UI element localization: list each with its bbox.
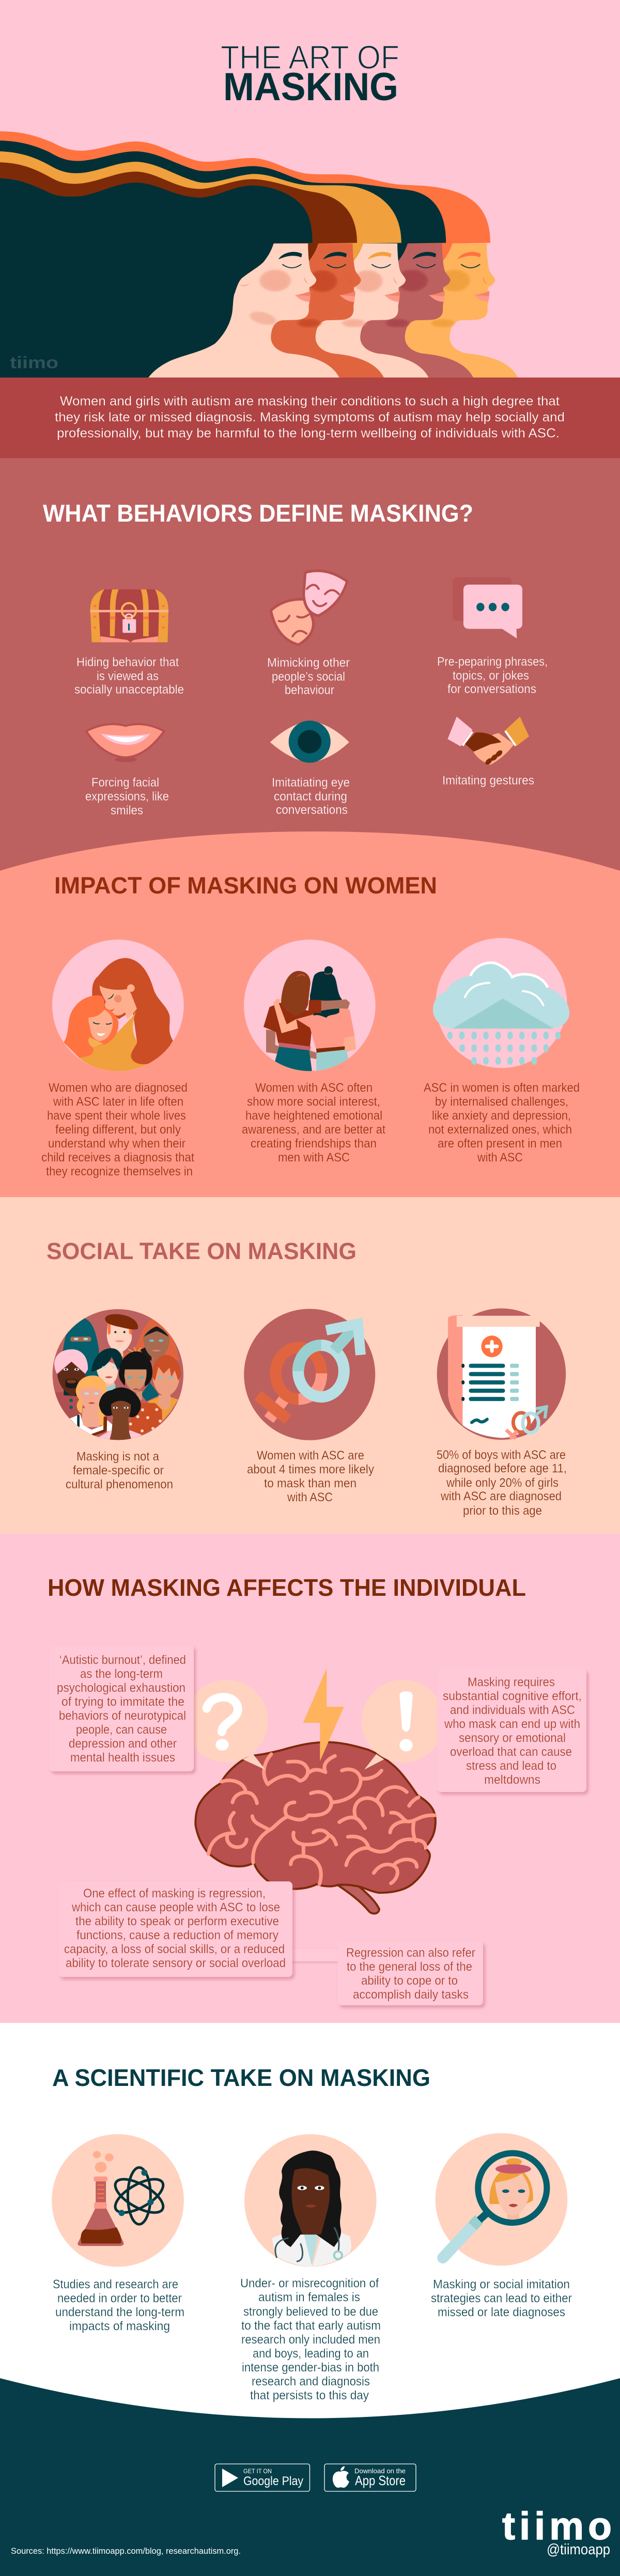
text: misrecognition of autism: research only included men: [241, 2333, 380, 2347]
text: not female-specific: female-specific or: [73, 1464, 164, 1478]
text: preparing phrases: for conversations: [447, 682, 536, 696]
item: imitating gestures: [442, 717, 534, 788]
callout: cognitive effort: meltdowns: [484, 1773, 540, 1787]
text: forcing facial expressions: smiles: [111, 804, 143, 818]
callout: cognitive effort: and individuals with ASC: [450, 1703, 575, 1717]
text: studies and research: impacts of masking: [69, 2319, 170, 2333]
text: rain cloud: ASC in women is often marked: [424, 1081, 580, 1095]
callout: cognitive effort: Masking requires: [468, 1675, 555, 1689]
title: MASKING: [223, 65, 398, 109]
text: not female-specific: Masking is not a: [76, 1450, 160, 1464]
icon: treasure chest with padlock: [90, 589, 168, 642]
illustration: rain cloud: [433, 938, 569, 1068]
text: four times more likely: about 4 times more likely: [247, 1463, 374, 1477]
badge: App Store: [324, 2464, 416, 2491]
text: diagnosis statistics: while only 20% of girls: [446, 1476, 559, 1490]
callout: regression: the ability to speak or perform executive: [75, 1914, 279, 1928]
item: forcing facial expressions: [85, 724, 169, 818]
text: four times more likely: Women with ASC are: [257, 1449, 364, 1463]
handle: @tiimoapp: @tiimoapp: [547, 2541, 610, 2558]
text: preparing phrases: Pre-peparing phrases,: [437, 655, 548, 669]
text: diagnosis statistics: [437, 1448, 567, 1518]
text: misrecognition of autism: Under- or misrecognition of: [240, 2276, 379, 2290]
callout: autistic burnout: people, can cause: [76, 1723, 167, 1737]
illustration: medical document: [437, 1308, 566, 1440]
callout: cognitive effort: sensory or emotional: [459, 1731, 566, 1745]
callout: autistic burnout: psychological exhaustion: [57, 1681, 185, 1695]
callout: regression: capacity, a loss of social skills, or a reduced: [64, 1942, 285, 1956]
illustration: flask and atom: [52, 2134, 184, 2267]
text: rain cloud: [424, 1081, 580, 1165]
text: two friends embracing: show more social interest,: [247, 1095, 380, 1109]
item: preparing phrases: [437, 577, 548, 696]
text: misrecognition of autism: research and diagnosis: [252, 2375, 370, 2389]
badge: Google Play: GET IT ON: [243, 2468, 272, 2475]
text: not female-specific: [66, 1450, 173, 1491]
text: social imitation strategies: missed or late diagnoses: [438, 2305, 565, 2319]
logo: tiimo: tiimo: [502, 2504, 612, 2548]
text: mimicking: Mimicking other: [267, 656, 350, 670]
text: mimicking: [267, 656, 350, 697]
icon: smiling lips: [86, 724, 164, 762]
illustration: magnifying glass: [436, 2133, 567, 2266]
callout: loss of ability to cope: accomplish daily tasks: [353, 1988, 469, 2002]
watermark logo: tiimo: [10, 353, 58, 372]
callout: loss of ability to cope: ability to cope or to: [361, 1974, 458, 1988]
intro banner: professionally, but may be harmful to the long-term wellbeing of individuals with ASC.: [57, 426, 560, 441]
hero illustration: five profiles with flowing hair: [0, 131, 518, 378]
text: rain cloud: are often present in men: [438, 1137, 562, 1151]
callout: loss of ability to cope: Regression can also refer: [346, 1946, 475, 1960]
callout: cognitive effort: who mask can end up with: [444, 1717, 580, 1731]
text: diagnosis statistics: 50% of boys with ASC are: [437, 1448, 566, 1462]
icon: brain with question, exclamation and lightning: [185, 1668, 444, 1913]
callout: loss of ability to cope: to the general loss of the: [347, 1960, 472, 1974]
text: eye contact: contact during: [274, 790, 347, 804]
text: studies and research: needed in order to better: [57, 2291, 182, 2305]
text: eye contact: [272, 776, 350, 817]
callout: cognitive effort: overload that can cause: [450, 1745, 572, 1759]
panel: a scientific take on masking: [0, 2023, 620, 2436]
text: four times more likely: with ASC: [287, 1490, 333, 1504]
text: hiding behavior: is viewed as: [97, 669, 159, 683]
panel: impact of masking on women: [0, 831, 620, 1197]
text: mother hugging child: feeling different, but only: [55, 1123, 181, 1137]
text: studies and research: [53, 2277, 184, 2333]
title: [221, 39, 399, 109]
callout: autistic burnout: depression and other: [69, 1737, 177, 1751]
text: misrecognition of autism: that persists to this day: [250, 2389, 369, 2402]
callout: regression: functions, cause a reduction of memory: [76, 1928, 278, 1942]
text: preparing phrases: [437, 655, 548, 696]
callout: autistic burnout: of trying to immitate the: [61, 1695, 184, 1709]
text: misrecognition of autism: and boys, leading to an: [253, 2347, 369, 2361]
callout: autistic burnout: mental health issues: [70, 1751, 175, 1765]
text: rain cloud: like anxiety and depression,: [432, 1109, 571, 1123]
text: studies and research: Studies and research are: [53, 2277, 178, 2291]
text: rain cloud: not externalized ones, which: [428, 1123, 572, 1137]
text: mother hugging child: with ASC later in life often: [53, 1095, 183, 1109]
text: forcing facial expressions: Forcing facial: [91, 776, 159, 790]
text: diagnosis statistics: with ASC are diagnosed: [440, 1489, 562, 1503]
item: eye contact: [270, 720, 350, 817]
illustration: gender symbols: [244, 1309, 375, 1440]
text: misrecognition of autism: intense gender-bias in both: [242, 2361, 379, 2375]
heading: social take on masking: SOCIAL TAKE ON MASKING: [47, 1238, 357, 1264]
callout: autistic burnout: ‘Autistic burnout’, defined: [59, 1653, 186, 1667]
heading: how masking affects the individual: HOW MASKING AFFECTS THE INDIVIDUAL: [48, 1574, 526, 1601]
text: two friends embracing: men with ASC: [278, 1151, 350, 1165]
text: not female-specific: cultural phenomenon: [66, 1478, 173, 1491]
text: two friends embracing: [242, 1081, 385, 1165]
text: rain cloud: by internalised challenges,: [435, 1095, 568, 1109]
heading: what behaviors define masking: WHAT BEHAVIORS DEFINE MASKING?: [43, 499, 473, 527]
text: misrecognition of autism: [240, 2276, 381, 2402]
text: mother hugging child: have spent their whole lives: [47, 1109, 186, 1123]
text: rain cloud: with ASC: [477, 1151, 523, 1165]
text: mother hugging child: understand why when their: [48, 1137, 185, 1151]
text: misrecognition of autism: autism in females is: [258, 2290, 360, 2304]
title: THE ART OF: [221, 39, 399, 76]
text: social imitation strategies: strategies can lead to either: [431, 2291, 572, 2305]
text: two friends embracing: creating friendships than: [251, 1137, 377, 1151]
illustration: doctor: [244, 2134, 377, 2267]
text: mother hugging child: child receives a diagnosis that: [41, 1151, 194, 1165]
text: eye contact: conversations: [276, 803, 348, 817]
badge: App Store: Download on the: [354, 2468, 406, 2475]
icon: handshake: [447, 717, 529, 765]
item: mimicking: [267, 571, 350, 697]
item: hiding behavior: [74, 589, 184, 697]
text: hiding behavior: [74, 655, 184, 697]
text: forcing facial expressions: [85, 776, 169, 818]
callout: cognitive effort: stress and lead to: [466, 1759, 556, 1773]
heading: a scientific take on masking: A SCIENTIFIC TAKE ON MASKING: [52, 2064, 430, 2091]
text: misrecognition of autism: to the fact that early autism: [241, 2319, 381, 2333]
illustration: two friends embracing: [244, 939, 376, 1072]
panel: how masking affects the individual: [0, 1534, 620, 2023]
text: two friends embracing: awareness, and are better at: [242, 1123, 385, 1137]
heading: impact of masking on women: IMPACT OF MASKING ON WOMEN: [54, 872, 437, 899]
callout: autistic burnout: behaviors of neurotypical: [59, 1709, 186, 1723]
text: four times more likely: [247, 1449, 374, 1504]
connector between regression callouts: [289, 1949, 341, 1961]
text: forcing facial expressions: expressions, like: [85, 790, 169, 804]
callout: regression: which can cause people with ASC to lose: [71, 1900, 280, 1914]
text: studies and research: understand the long-term: [55, 2305, 184, 2319]
callout: regression: [58, 1881, 292, 1977]
text: mother hugging child: [41, 1081, 194, 1179]
text: diagnosis statistics: diagnosed before age 11,: [438, 1462, 567, 1475]
text: social imitation strategies: [431, 2277, 572, 2319]
icon: eye: [270, 720, 349, 763]
text: mimicking: behaviour: [285, 683, 334, 697]
illustration: diverse group of people: [53, 1309, 183, 1441]
text: eye contact: Imitatiating eye: [272, 776, 350, 790]
badge: Google Play: Google Play: [243, 2474, 303, 2488]
text: mother hugging child: they recognize themselves in: [46, 1165, 193, 1179]
callout: cognitive effort: [437, 1669, 586, 1792]
text: preparing phrases: topics, or jokes: [453, 669, 529, 683]
panel: what behaviors define masking: [0, 458, 620, 876]
text: misrecognition of autism: strongly believed to be due: [243, 2305, 378, 2319]
callout: regression: ability to tolerate sensory or social overload: [66, 1956, 286, 1970]
callout: autistic burnout: as the long-term: [80, 1667, 163, 1681]
footer: [0, 2378, 620, 2576]
callout: loss of ability to cope: [337, 1941, 483, 2005]
callout: regression: One effect of masking is regression,: [83, 1887, 266, 1900]
text: hiding behavior: socially unacceptable: [74, 683, 184, 697]
text: mimicking: people’s social: [272, 670, 345, 684]
text: hiding behavior: Hiding behavior that: [76, 655, 179, 669]
text: four times more likely: to mask than men: [264, 1477, 357, 1490]
intro banner: [0, 378, 620, 458]
icon: theatre masks: [271, 571, 347, 645]
text: diagnosis statistics: prior to this age: [463, 1504, 542, 1518]
illustration: mother hugging child: [52, 939, 184, 1072]
badge: Google Play: [215, 2464, 310, 2491]
icon: speech bubbles: [453, 577, 522, 638]
callout: autistic burnout: [49, 1645, 194, 1771]
text: imitating gestures: Imitating gestures: [442, 774, 534, 788]
callout: cognitive effort: substantial cognitive effort,: [443, 1689, 582, 1703]
sources: Sources: https://www.tiimoapp.com/blog, researchautism.org.: [11, 2546, 241, 2556]
text: social imitation strategies: Masking or social imitation: [433, 2277, 570, 2291]
text: two friends embracing: have heightened emotional: [245, 1109, 382, 1123]
text: two friends embracing: Women with ASC often: [255, 1081, 373, 1095]
intro banner: Women and girls with autism are masking their conditions to such a high degree that: [60, 394, 560, 409]
badge: App Store: App Store: [355, 2473, 406, 2488]
intro banner: they risk late or missed diagnosis. Masking symptoms of autism may help socially and: [55, 410, 565, 425]
text: mother hugging child: Women who are diagnosed: [49, 1081, 188, 1095]
panel: social take on masking: [0, 1197, 620, 1534]
